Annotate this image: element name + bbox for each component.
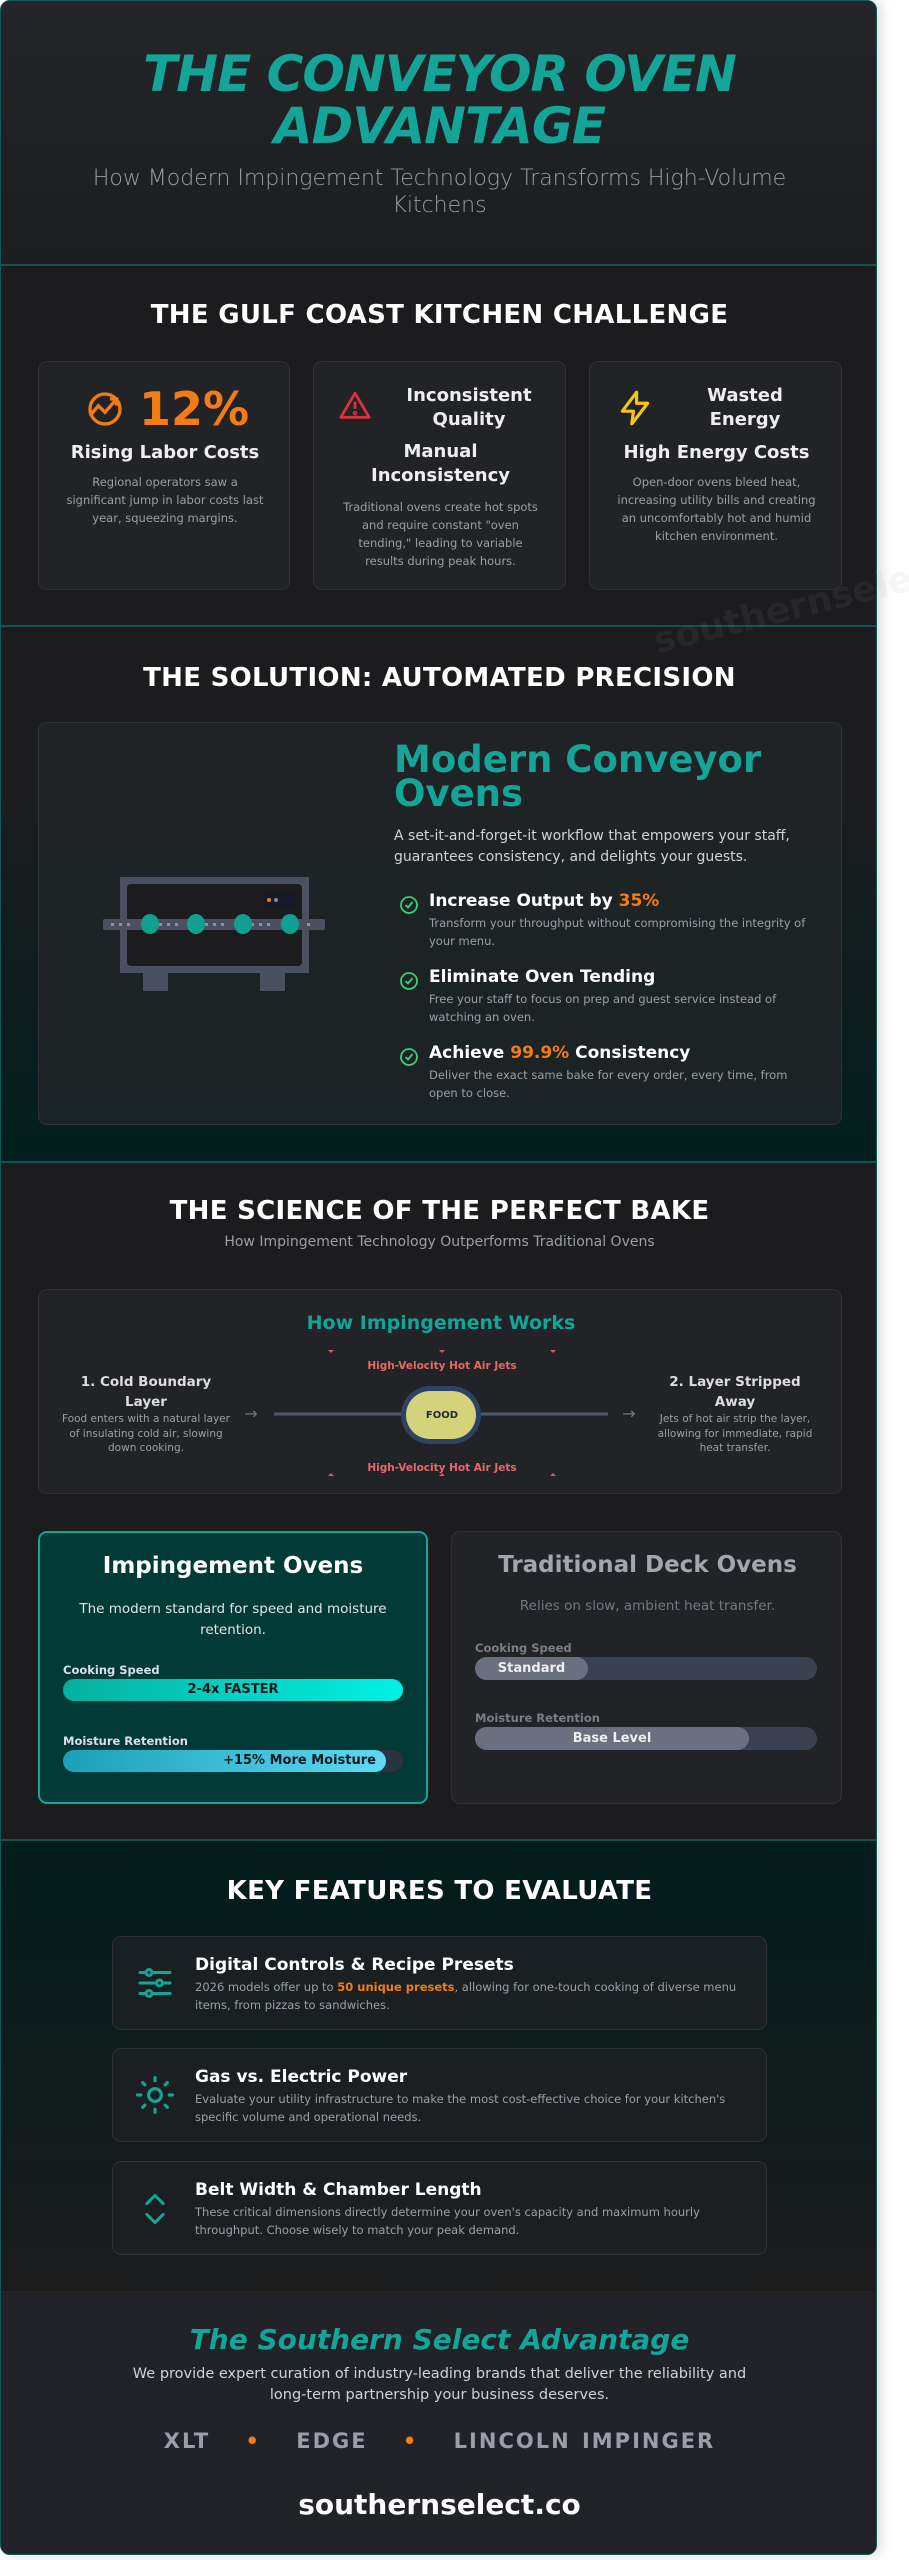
label: Wasted Energy bbox=[707, 385, 783, 430]
feature: belt width bbox=[112, 2161, 767, 2255]
bullet: tending: Free your staff to focus on prep and guest service instead of watching an oven. bbox=[429, 992, 776, 1024]
heading: Manual bbox=[403, 441, 478, 462]
bar: cooking speed bbox=[63, 1663, 403, 1701]
diagram: food and jets: → bbox=[244, 1404, 258, 1423]
step 2: Away bbox=[715, 1394, 755, 1410]
text: Relies on slow, ambient heat transfer. bbox=[520, 1598, 775, 1614]
feature: digital controls: 2026 models offer up to 50 unique presets, allowing for one-touch cooking of diverse menu items, from pizzas to sandwiches. bbox=[195, 1980, 736, 2012]
feature: gas vs electric bbox=[112, 2048, 767, 2142]
icon: sun bbox=[136, 2076, 174, 2114]
subtitle: How Modern Impingement Technology Transforms High-Volume Kitchens bbox=[93, 166, 786, 218]
heading: THE SOLUTION: AUTOMATED PRECISION bbox=[143, 663, 736, 693]
heading: How Impingement Works bbox=[307, 1312, 575, 1334]
diagram: food and jets: High-Velocity Hot Air Jets bbox=[367, 1462, 517, 1474]
icon: chevrons bbox=[145, 2194, 165, 2224]
bullet: consistency: Deliver the exact same bake for every order, every time, from open to close. bbox=[429, 1068, 787, 1100]
feature: digital controls bbox=[112, 1936, 767, 2030]
text: Open-door ovens bleed heat, increasing utility bills and creating an uncomfortably hot and humid kitchen environment. bbox=[617, 475, 816, 543]
bullet: output bbox=[400, 891, 806, 948]
panel: how impingement works bbox=[38, 1289, 842, 1494]
bar: moisture bbox=[475, 1711, 817, 1750]
bar: speed: Cooking Speed bbox=[475, 1641, 572, 1655]
icon: lightning bbox=[620, 390, 650, 426]
panel: energy bbox=[589, 361, 842, 590]
step 1 bbox=[62, 1374, 230, 1454]
heading: Traditional Deck Ovens bbox=[498, 1552, 797, 1578]
feature: belt width: Belt Width & Chamber Length bbox=[195, 2180, 482, 2200]
section: challenge bbox=[1, 266, 878, 627]
feature: gas vs electric: Evaluate your utility infrastructure to make the most cost-effective choice for your kitchen's specific volume and operational needs. bbox=[195, 2092, 725, 2124]
heading: Impingement Ovens bbox=[103, 1553, 363, 1579]
bullet: output: Increase Output by 35% bbox=[429, 891, 659, 911]
panel: labor costs bbox=[38, 361, 290, 590]
diagram: food and jets bbox=[244, 1350, 636, 1476]
panel: modern ovens bbox=[38, 722, 842, 1125]
section: solution bbox=[1, 627, 878, 1163]
icon: trend bbox=[88, 392, 122, 426]
step 2: 2. Layer Stripped bbox=[669, 1374, 801, 1390]
title: THE CONVEYOR OVEN bbox=[143, 45, 736, 103]
panel: impingement ovens bbox=[38, 1531, 428, 1804]
text: Regional operators saw a significant jump in labor costs last year, squeezing margins. bbox=[66, 475, 264, 525]
label: Inconsistent Quality bbox=[406, 385, 532, 430]
heading: The Southern Select Advantage bbox=[190, 2323, 689, 2356]
description: A set-it-and-forget-it workflow that empowers your staff, guarantees consistency, and delights your guests. bbox=[394, 828, 790, 865]
stat: 12% bbox=[139, 382, 249, 436]
bar: moisture bbox=[63, 1734, 403, 1772]
diagram: food and jets: High-Velocity Hot Air Jets bbox=[367, 1360, 517, 1372]
step 1: Food enters with a natural layer of insulating cold air, slowing down cooking. bbox=[62, 1413, 230, 1454]
step 1: Layer bbox=[125, 1394, 167, 1410]
heading: THE GULF COAST KITCHEN CHALLENGE bbox=[151, 300, 728, 330]
section: science bbox=[1, 1163, 878, 1841]
illustration: conveyor oven bbox=[103, 877, 325, 991]
heading: Ovens bbox=[394, 772, 523, 815]
subtitle: How Impingement Technology Outperforms Traditional Ovens bbox=[224, 1234, 655, 1250]
bullet: consistency bbox=[400, 1043, 787, 1100]
text: Traditional ovens create hot spots and require constant "oven tending," leading to variable results during peak hours. bbox=[343, 500, 538, 568]
panel: traditional ovens bbox=[451, 1531, 842, 1804]
heading: High Energy Costs bbox=[624, 442, 809, 463]
bullet: output: Transform your throughput without compromising the integrity of your menu. bbox=[429, 916, 805, 948]
diagram: food and jets: FOOD bbox=[426, 1410, 458, 1421]
bar: moisture: Base Level bbox=[573, 1731, 651, 1746]
title: ADVANTAGE bbox=[274, 97, 605, 155]
diagram: food and jets: → bbox=[622, 1404, 636, 1423]
section: footer bbox=[1, 2291, 878, 2560]
bar: moisture: +15% More Moisture bbox=[223, 1753, 376, 1768]
heading: KEY FEATURES TO EVALUATE bbox=[227, 1876, 652, 1906]
header section bbox=[1, 1, 878, 266]
feature: digital controls: Digital Controls & Recipe Presets bbox=[195, 1955, 514, 1975]
bar: cooking speed: 2-4x FASTER bbox=[188, 1682, 278, 1697]
brands: XLT • EDGE • LINCOLN IMPINGER bbox=[164, 2429, 715, 2453]
text: The modern standard for speed and moisture retention. bbox=[79, 1601, 387, 1638]
step 2 bbox=[658, 1374, 812, 1454]
bullet: tending: Eliminate Oven Tending bbox=[429, 967, 655, 987]
step 1: 1. Cold Boundary bbox=[81, 1374, 211, 1390]
feature: gas vs electric: Gas vs. Electric Power bbox=[195, 2067, 407, 2087]
label: Rising Labor Costs bbox=[71, 442, 259, 463]
bullet: tending bbox=[400, 967, 776, 1024]
panel: manual inconsistency bbox=[313, 361, 566, 590]
heading bbox=[394, 738, 762, 815]
bullet: consistency: Achieve 99.9% Consistency bbox=[429, 1043, 690, 1063]
section: features bbox=[1, 1841, 878, 2291]
bar: speed bbox=[475, 1641, 817, 1680]
heading bbox=[371, 441, 510, 486]
heading: Inconsistency bbox=[371, 465, 510, 486]
bar: speed: Standard bbox=[498, 1661, 565, 1676]
icon: warning bbox=[339, 392, 371, 419]
feature: belt width: These critical dimensions directly determine your oven's capacity and maximum hourly throughput. Choose wisely to match your peak demand. bbox=[195, 2205, 700, 2237]
bar: cooking speed: Cooking Speed bbox=[63, 1663, 160, 1677]
title bbox=[143, 45, 736, 155]
bar: moisture: Moisture Retention bbox=[63, 1734, 188, 1748]
bar: moisture: Moisture Retention bbox=[475, 1711, 600, 1725]
heading: Modern Conveyor bbox=[394, 738, 761, 781]
heading: THE SCIENCE OF THE PERFECT BAKE bbox=[170, 1196, 709, 1226]
icon: sliders bbox=[138, 1968, 172, 1998]
text: We provide expert curation of industry-leading brands that deliver the reliability and long-term partnership your business deserves. bbox=[133, 2366, 746, 2403]
website: southernselect.co bbox=[298, 2488, 581, 2521]
step 2: Jets of hot air strip the layer, allowing for immediate, rapid heat transfer. bbox=[658, 1413, 812, 1454]
